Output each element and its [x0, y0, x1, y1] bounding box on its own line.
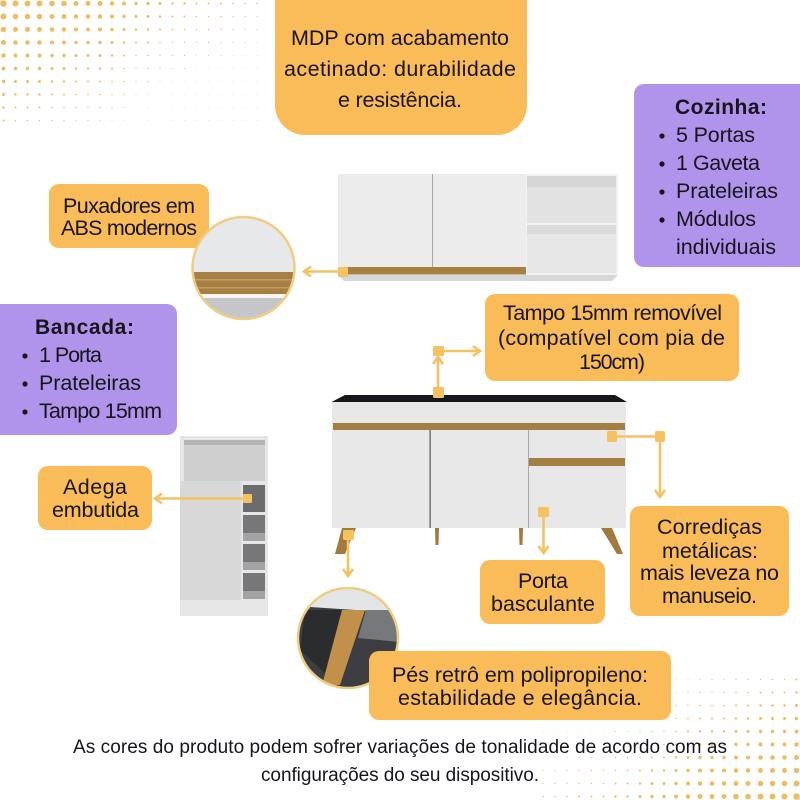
- callout: Pés retrô: [369, 651, 671, 720]
- wall cabinet: [338, 174, 618, 281]
- panel: Bancada: Tampo 15mm: [39, 399, 162, 423]
- detail circle: handle close-up: [190, 214, 300, 324]
- arrow: leg pointer: [343, 530, 354, 576]
- callout: Corrediças: Corrediças: [657, 515, 762, 539]
- tall wine cabinet: [180, 436, 268, 616]
- panel: Bancada: 1 Porta: [39, 343, 102, 367]
- callout: Puxadores: Puxadores em: [63, 194, 195, 218]
- callout: Adega: [38, 466, 152, 530]
- callout: MDP finish: [275, 0, 527, 135]
- panel: Cozinha: 5 Portas: [676, 123, 755, 147]
- callout: Adega: embutida: [52, 498, 139, 522]
- arrow: countertop pointer: [433, 346, 480, 398]
- callout: Porta basculante: [480, 560, 605, 624]
- callout: Porta basculante: Porta: [518, 569, 568, 593]
- halftone dots: bottom right: [542, 678, 800, 800]
- callout: Puxadores: ABS modernos: [61, 216, 197, 240]
- callout: Porta basculante: basculante: [491, 592, 595, 616]
- callout: Tampo: 150cm): [579, 350, 645, 374]
- callout: Adega: Adega: [63, 475, 127, 499]
- callout: MDP finish: acetinado: durabilidade: [284, 57, 516, 81]
- callout: Puxadores: [49, 184, 209, 248]
- arrow: flap door pointer: [538, 507, 549, 553]
- disclaimer text: configurações do seu dispositivo.: [261, 765, 539, 786]
- callout: Pés retrô: Pés retrô em polipropileno:: [392, 663, 648, 687]
- arrow: handle pointer: [304, 266, 348, 277]
- callout: Corrediças: metálicas:: [662, 539, 758, 563]
- panel: Bancada: [0, 304, 177, 435]
- callout: Tampo: Tampo 15mm removível: [503, 301, 722, 325]
- callout: Tampo: [485, 294, 739, 381]
- panel: Cozinha: individuais: [676, 235, 776, 259]
- halftone dots: top left: [0, 0, 258, 122]
- panel: Cozinha: Prateleiras: [676, 179, 778, 203]
- panel: Cozinha: 1 Gaveta: [676, 151, 760, 175]
- callout: Corrediças: [630, 506, 789, 616]
- disclaimer text: As cores do produto podem sofrer variações de tonalidade de acordo com as: [73, 737, 727, 758]
- callout: Tampo: (compatível com pia de: [498, 326, 725, 350]
- panel: Cozinha: Cozinha:: [675, 96, 767, 119]
- callout: Corrediças: manuseio.: [662, 584, 757, 608]
- panel: Bancada: Bancada:: [35, 316, 134, 339]
- panel: Cozinha: Módulos: [676, 207, 756, 231]
- panel: Cozinha: [634, 84, 800, 267]
- callout: Corrediças: mais leveza no: [640, 561, 779, 585]
- panel: Bancada: Prateleiras: [39, 371, 141, 395]
- callout: MDP finish: e resistência.: [338, 88, 462, 112]
- callout: MDP finish: MDP com acabamento: [291, 26, 509, 50]
- arrow: wine rack pointer: [155, 494, 252, 504]
- main sideboard: [332, 395, 627, 554]
- arrow: drawer slide pointer: [607, 431, 665, 497]
- disclaimer text: [73, 737, 727, 786]
- callout: Pés retrô: estabilidade e elegância.: [398, 686, 642, 710]
- detail circle: retro leg close-up: [295, 586, 401, 690]
